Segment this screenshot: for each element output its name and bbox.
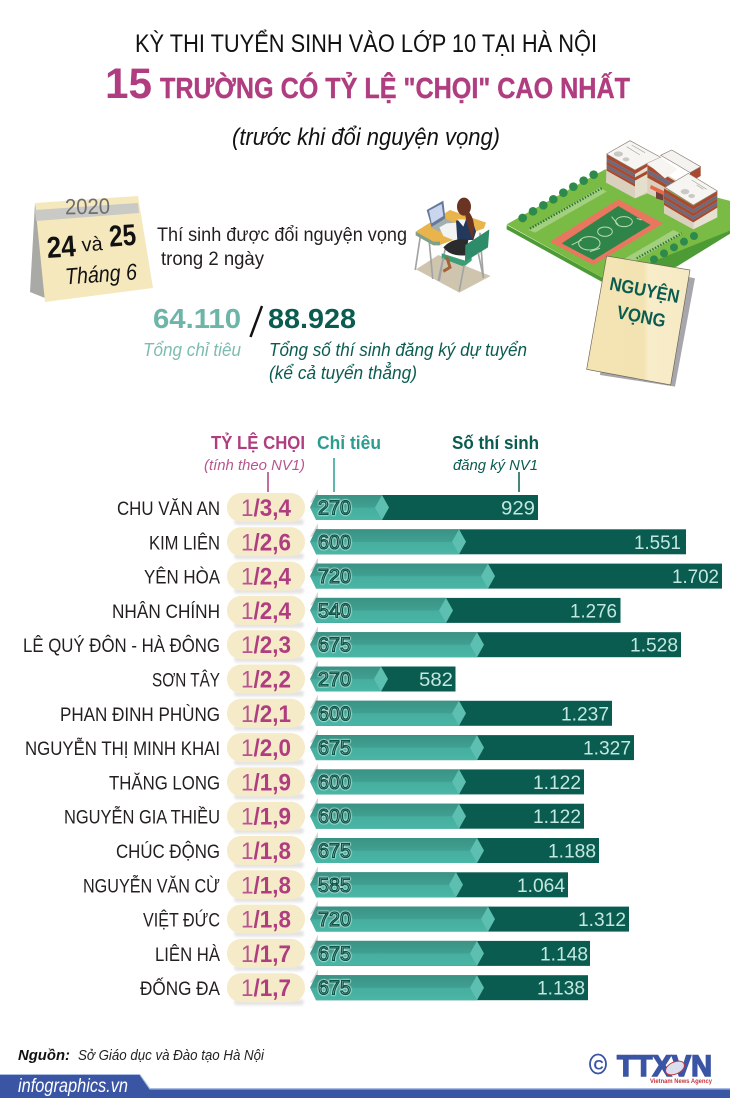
row: Chúc Động: 1.188 <box>548 842 596 862</box>
row: Việt Đức <box>143 901 629 937</box>
column header: registered candidates: Số thí sinh <box>452 433 539 453</box>
statistic: total quota: 64.110 <box>153 303 241 334</box>
row: Phan Đinh Phùng: 1.237 <box>561 704 609 725</box>
column header: ratio: TỶ LỆ CHỌI <box>211 432 305 453</box>
row: Sơn Tây: 582 <box>419 670 453 691</box>
statistic: total quota <box>143 303 241 360</box>
row: Yên Hòa <box>144 558 722 594</box>
row: Nguyễn Gia Thiều: 600 <box>318 806 351 828</box>
row: Phan Đinh Phùng: 600 <box>318 703 351 725</box>
row: Nguyễn Thị Minh Khai: NGUYỄN THỊ MINH KHAI <box>25 738 220 760</box>
column header: registered candidates <box>452 433 539 492</box>
row: Nguyễn Văn Cừ: 585 <box>318 875 351 897</box>
statistic: total candidates: (kể cả tuyển thẳng) <box>269 362 417 383</box>
school building <box>606 141 717 229</box>
column header: quota: Chỉ tiêu <box>317 433 381 453</box>
row: Phan Đinh Phùng: PHAN ĐINH PHÙNG <box>60 704 220 726</box>
row: Chu Văn An: 1/3,4 <box>241 495 292 522</box>
source note <box>18 1047 265 1064</box>
row: Chúc Động: 1/1,8 <box>241 838 291 865</box>
row: Lê Quý Đôn - Hà Đông: LÊ QUÝ ĐÔN - HÀ ĐÔNG <box>23 635 220 657</box>
row: Nguyễn Thị Minh Khai: 1.327 <box>583 739 631 760</box>
row: Nguyễn Gia Thiều: 1.122 <box>533 807 581 828</box>
row: Sơn Tây <box>152 660 456 696</box>
icon: desk calendar: 2020 <box>65 194 110 219</box>
source note: Sở Giáo dục và Đào tạo Hà Nội <box>78 1047 265 1064</box>
row: Thăng Long: THĂNG LONG <box>109 773 220 794</box>
paper: Nguyện vọng sheet: VỌNG <box>615 301 668 331</box>
icon: desk calendar: 24 <box>46 230 77 265</box>
row: Yên Hòa: 1.702 <box>672 567 719 588</box>
statistic: total candidates <box>268 303 527 383</box>
row: Nguyễn Văn Cừ: 1.064 <box>517 876 565 897</box>
row: Chu Văn An: 929 <box>501 498 535 520</box>
row: Chu Văn An: 270 <box>318 498 351 520</box>
row: Phan Đinh Phùng <box>60 695 612 731</box>
row: Nguyễn Văn Cừ <box>83 866 568 902</box>
logo: TTXVN: Vietnam News Agency <box>650 1078 712 1085</box>
back wing <box>661 150 701 182</box>
row: Đống Đa: 1/1,7 <box>241 975 291 1002</box>
row: Nguyễn Văn Cừ: NGUYỄN VĂN CỪ <box>83 875 220 897</box>
row: Kim Liên: 1.551 <box>634 533 681 554</box>
row: Yên Hòa: 720 <box>318 566 351 588</box>
row: Kim Liên: 600 <box>318 532 351 554</box>
row: Việt Đức: 1/1,8 <box>241 907 291 934</box>
row: Lê Quý Đôn - Hà Đông: 1.528 <box>630 636 678 657</box>
icon: desk calendar: và <box>81 233 104 257</box>
row: Phan Đinh Phùng: 1/2,1 <box>241 701 291 728</box>
centre block <box>635 163 676 201</box>
row: Nguyễn Gia Thiều <box>64 798 584 834</box>
row: Liên Hà: LIÊN HÀ <box>155 944 220 966</box>
icon: student at desk with laptop <box>415 198 491 293</box>
row: Kim Liên: KIM LIÊN <box>149 532 220 554</box>
logo: TTXVN: TTXVN <box>617 1050 712 1083</box>
row: Liên Hà: 1/1,7 <box>241 941 291 968</box>
info text: change period <box>157 225 407 270</box>
row: Chu Văn An: CHU VĂN AN <box>117 499 220 520</box>
column header: registered candidates: đăng ký NV1 <box>453 457 538 474</box>
left wing <box>606 141 677 198</box>
row: Yên Hòa: YÊN HÒA <box>144 567 220 589</box>
column header: quota <box>317 433 381 492</box>
school grounds and field <box>507 169 730 283</box>
subtitle note: (trước khi đổi nguyện vọng) <box>232 124 500 151</box>
row: Đống Đa <box>140 969 588 1005</box>
row: Thăng Long: 1.122 <box>533 773 581 794</box>
row: Nhân Chính: 540 <box>318 600 351 622</box>
row: Nguyễn Văn Cừ: 1/1,8 <box>241 872 291 899</box>
row: Lê Quý Đôn - Hà Đông <box>23 626 681 662</box>
row: Liên Hà <box>155 935 590 971</box>
row: Nguyễn Thị Minh Khai: 675 <box>318 738 351 760</box>
slash divider <box>250 306 262 337</box>
row: Chúc Động: 675 <box>318 840 351 862</box>
info text: change period: trong 2 ngày <box>161 249 264 270</box>
footer banner: infographics.vn <box>18 1076 128 1097</box>
source note: Nguồn: <box>18 1047 70 1064</box>
row: Đống Đa: 1.138 <box>537 979 585 1000</box>
row: Liên Hà: 675 <box>318 943 351 965</box>
icon: desk calendar <box>30 194 153 302</box>
title: number 15: 15 <box>105 60 152 108</box>
logo: TTXVN: C <box>594 1056 604 1072</box>
column header: ratio <box>204 432 305 492</box>
row: Nguyễn Thị Minh Khai: 1/2,0 <box>241 735 291 762</box>
row: Sơn Tây: SƠN TÂY <box>152 670 220 692</box>
row: Thăng Long <box>109 763 584 799</box>
row: Việt Đức: 720 <box>318 909 351 931</box>
row: Thăng Long: 1/1,9 <box>241 769 291 796</box>
row: Nhân Chính: 1/2,4 <box>241 598 292 625</box>
info text: change period: Thí sinh được đổi nguyện vọng <box>157 225 407 246</box>
icon: desk calendar: Tháng 6 <box>64 258 138 289</box>
row: Kim Liên: 1/2,6 <box>241 529 291 556</box>
paper: Nguyện vọng sheet <box>587 256 695 387</box>
row: Kim Liên <box>149 523 686 559</box>
row: Chúc Động <box>116 832 599 868</box>
right wing <box>664 173 717 229</box>
row: Nguyễn Thị Minh Khai <box>25 729 634 765</box>
row: Sơn Tây: 1/2,2 <box>241 666 291 694</box>
row: Liên Hà: 1.148 <box>540 944 588 965</box>
row: Nhân Chính: NHÂN CHÍNH <box>112 601 220 623</box>
row: Đống Đa: ĐỐNG ĐA <box>140 978 220 1000</box>
row: Đống Đa: 675 <box>318 978 351 1000</box>
row: Yên Hòa: 1/2,4 <box>241 564 292 591</box>
row: Nhân Chính: 1.276 <box>570 601 617 622</box>
statistic: total candidates: 88.928 <box>268 303 356 334</box>
row: Việt Đức: VIỆT ĐỨC <box>143 910 220 932</box>
icon: desk calendar: 25 <box>108 219 137 254</box>
row: Chúc Động: CHÚC ĐỘNG <box>116 841 220 863</box>
row: Nguyễn Gia Thiều: NGUYỄN GIA THIỀU <box>64 807 220 829</box>
statistic: total quota: Tổng chỉ tiêu <box>143 340 241 360</box>
row: Sơn Tây: 270 <box>318 669 351 691</box>
paper: Nguyện vọng sheet: NGUYỆN <box>608 273 681 307</box>
footer banner <box>0 1074 730 1098</box>
row: Lê Quý Đôn - Hà Đông: 1/2,3 <box>241 632 291 659</box>
title: highlighted subtitle: TRƯỜNG CÓ TỶ LỆ "CHỌI" CAO NHẤT <box>160 71 630 105</box>
row: Nhân Chính <box>112 592 620 628</box>
column header: ratio: (tính theo NV1) <box>204 457 305 474</box>
row: Việt Đức: 1.312 <box>578 910 626 931</box>
row: Chu Văn An <box>117 489 538 525</box>
statistic: total candidates: Tổng số thí sinh đăng ký dự tuyển <box>269 340 527 360</box>
row: Lê Quý Đôn - Hà Đông: 675 <box>318 635 351 657</box>
title: main heading line: KỲ THI TUYỂN SINH VÀO LỚP 10 TẠI HÀ NỘI <box>135 29 597 58</box>
row: Nguyễn Gia Thiều: 1/1,9 <box>241 804 291 831</box>
row: Thăng Long: 600 <box>318 772 351 794</box>
